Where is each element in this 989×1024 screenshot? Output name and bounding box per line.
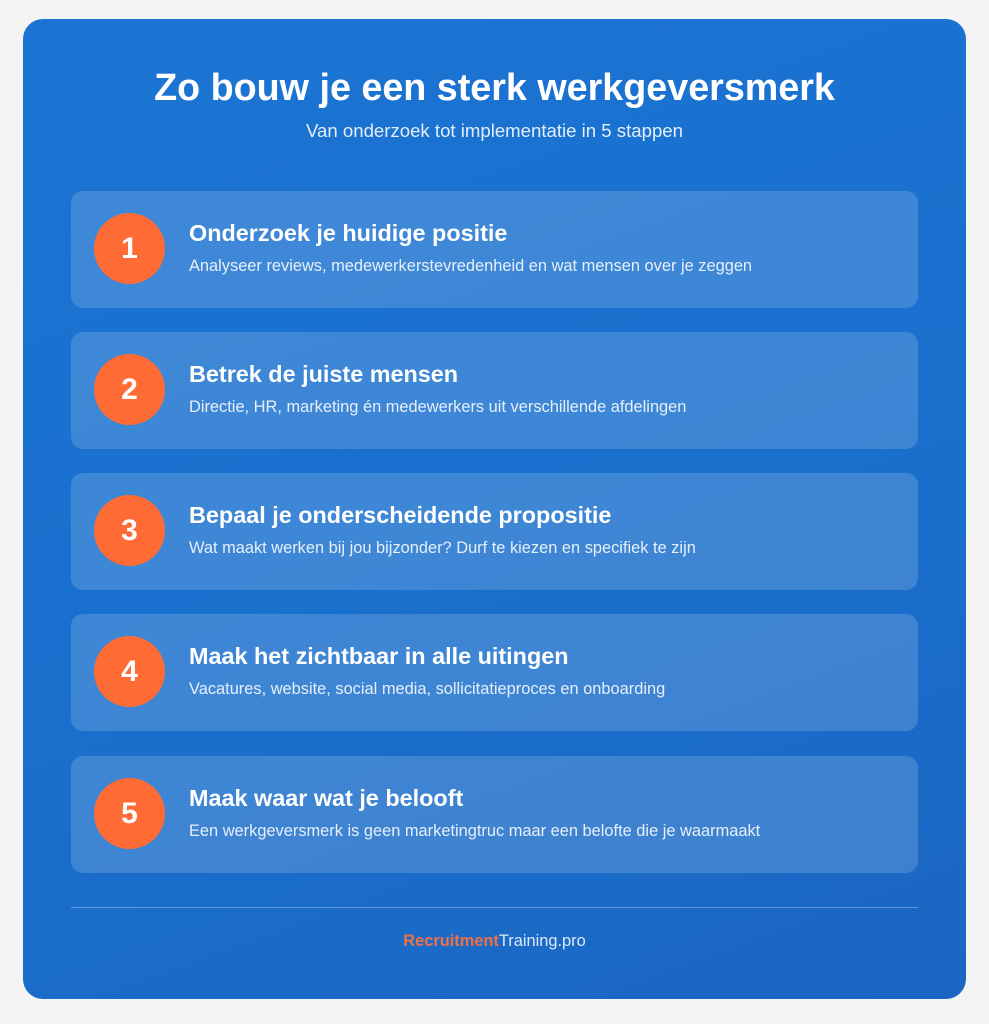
footer brand: RecruitmentTraining.pro [403,932,586,950]
badge 5 [94,778,165,849]
desc 2: Directie, HR, marketing én medewerkers uit verschillende afdelingen [189,398,686,416]
heading 2: Betrek de juiste mensen [189,361,458,387]
desc 1: Analyseer reviews, medewerkerstevredenheid en wat mensen over je zeggen [189,257,752,275]
step 3 [71,473,918,590]
desc 4: Vacatures, website, social media, sollicitatieproces en onboarding [189,680,665,698]
badge 4 [94,636,165,707]
heading 1: Onderzoek je huidige positie [189,220,507,246]
badge 3: 3 [121,514,138,547]
desc 3: Wat maakt werken bij jou bijzonder? Durf te kiezen en specifiek te zijn [189,539,696,557]
badge 1 [94,213,165,284]
title: Zo bouw je een sterk werkgeversmerk [154,66,835,108]
badge 2: 2 [121,373,138,406]
badge 4: 4 [121,655,138,688]
step 5 [71,756,918,873]
badge 1: 1 [121,232,138,265]
step 4 [71,614,918,731]
badge 2 [94,354,165,425]
step 1 [71,191,918,308]
heading 5: Maak waar wat je belooft [189,785,463,811]
desc 5: Een werkgeversmerk is geen marketingtruc maar een belofte die je waarmaakt [189,822,760,840]
badge 5: 5 [121,797,138,830]
heading 4: Maak het zichtbaar in alle uitingen [189,643,569,669]
heading 3: Bepaal je onderscheidende propositie [189,502,611,528]
step 2 [71,332,918,449]
badge 3 [94,495,165,566]
subtitle: Van onderzoek tot implementatie in 5 stappen [306,120,683,141]
